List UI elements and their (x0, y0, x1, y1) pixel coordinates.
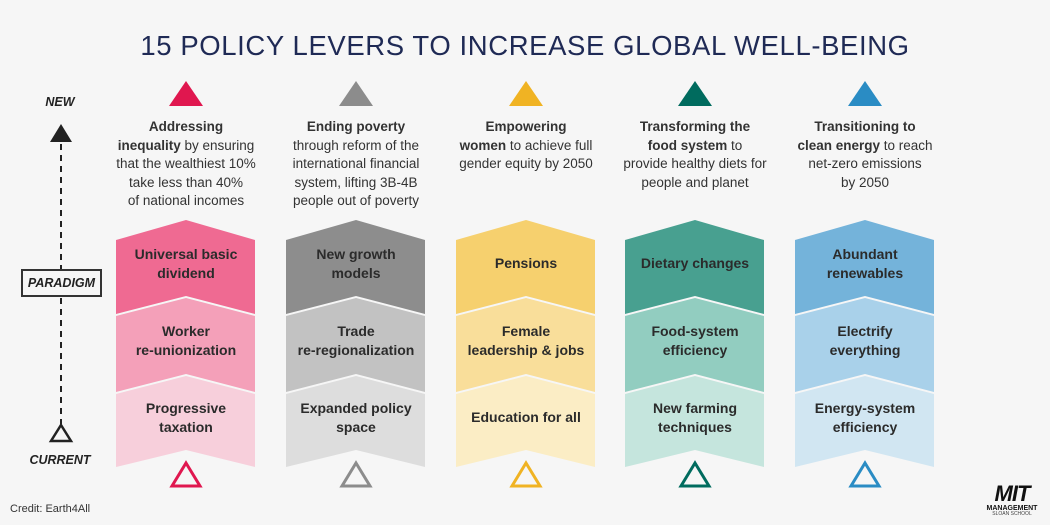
column 2 chevrons (286, 220, 425, 467)
heading: inequality: that the wealthiest 10% (116, 156, 256, 171)
text: everything (830, 342, 900, 358)
labels column 2 (316, 246, 396, 281)
text: taxation (159, 419, 213, 435)
column 1 chevrons (116, 220, 255, 467)
labels column 5: Abundant (832, 246, 898, 262)
labels column 5: renewables (827, 265, 903, 281)
text: Trade (337, 323, 375, 339)
text: Education for all (471, 409, 581, 425)
title: 15 POLICY LEVERS TO INCREASE GLOBAL WELL-BEING (140, 30, 910, 61)
heading: women: gender equity by 2050 (459, 156, 593, 171)
text: Energy-system (815, 400, 915, 416)
text: Worker (162, 323, 210, 339)
labels column 1 (135, 246, 237, 281)
text: techniques (658, 419, 732, 435)
labels column 2: New growth (316, 246, 396, 262)
label: new: NEW (45, 95, 75, 109)
text: leadership & jobs (468, 342, 584, 358)
labels column 3: Pensions (495, 255, 557, 271)
heading: energy: clean energy to reach (797, 138, 933, 152)
text: New farming (653, 400, 737, 416)
bottom outline triangles (172, 463, 879, 486)
heading: food: provide healthy diets for (623, 156, 767, 171)
label: paradigm (21, 269, 102, 297)
text: space (336, 419, 376, 435)
top triangles (169, 81, 882, 106)
heading: inequality (116, 119, 256, 208)
heading: women: women to achieve full (460, 138, 592, 152)
logo: MIT Management: SLOAN SCHOOL (992, 511, 1032, 517)
heading: poverty (293, 119, 419, 208)
heading: women: Empowering (485, 119, 566, 134)
column 4 chevrons (625, 220, 764, 467)
labels column 1: dividend (157, 265, 215, 281)
dashed line (60, 144, 62, 424)
heading: poverty: international financial (293, 156, 419, 171)
heading: inequality: Addressing (149, 119, 223, 134)
heading: poverty: people out of poverty (293, 193, 419, 208)
column 3 chevrons (456, 220, 595, 467)
text: Female (502, 323, 550, 339)
heading: food: food system to (648, 138, 742, 152)
icon: filled triangle (50, 124, 72, 142)
logo: MIT Management (986, 481, 1038, 517)
text: Expanded policy (300, 400, 412, 416)
text: Food-system (651, 323, 739, 339)
heading: poverty: system, lifting 3B-4B (294, 174, 418, 190)
text: Electrify (837, 323, 893, 339)
icon: outline triangle (48, 424, 74, 442)
column 5 chevrons (795, 220, 934, 467)
text: re-unionization (136, 342, 236, 358)
heading: food: Transforming the (640, 119, 750, 134)
axis: new to current (21, 95, 102, 467)
heading: inequality: inequality by ensuring (118, 138, 254, 152)
credit: Credit: Earth4All (10, 503, 90, 515)
heading: food (623, 119, 767, 190)
text: efficiency (833, 419, 897, 435)
text: efficiency (663, 342, 727, 358)
labels column 4: Dietary changes (641, 255, 749, 271)
logo: MIT Management: MIT (995, 481, 1029, 506)
heading: energy: net-zero emissions (808, 156, 922, 171)
labels column 5 (827, 246, 903, 281)
heading: energy: by 2050 (841, 174, 889, 190)
text: re-regionalization (298, 342, 414, 358)
logo: MIT Management: MANAGEMENT (987, 505, 1037, 512)
heading: energy: Transitioning to (814, 119, 916, 134)
heading: poverty: through reform of the (293, 138, 419, 152)
heading: poverty: Ending poverty (307, 119, 405, 134)
label: current: CURRENT (29, 453, 91, 467)
text: Progressive (146, 400, 226, 416)
heading: energy (797, 119, 933, 190)
labels column 2: models (331, 265, 380, 281)
heading: food: people and planet (641, 174, 749, 190)
labels column 1: Universal basic (135, 246, 237, 262)
heading: inequality: take less than 40% (129, 174, 243, 190)
label: paradigm: PARADIGM (28, 276, 95, 290)
heading: women (459, 119, 593, 171)
heading: inequality: of national incomes (128, 193, 244, 208)
